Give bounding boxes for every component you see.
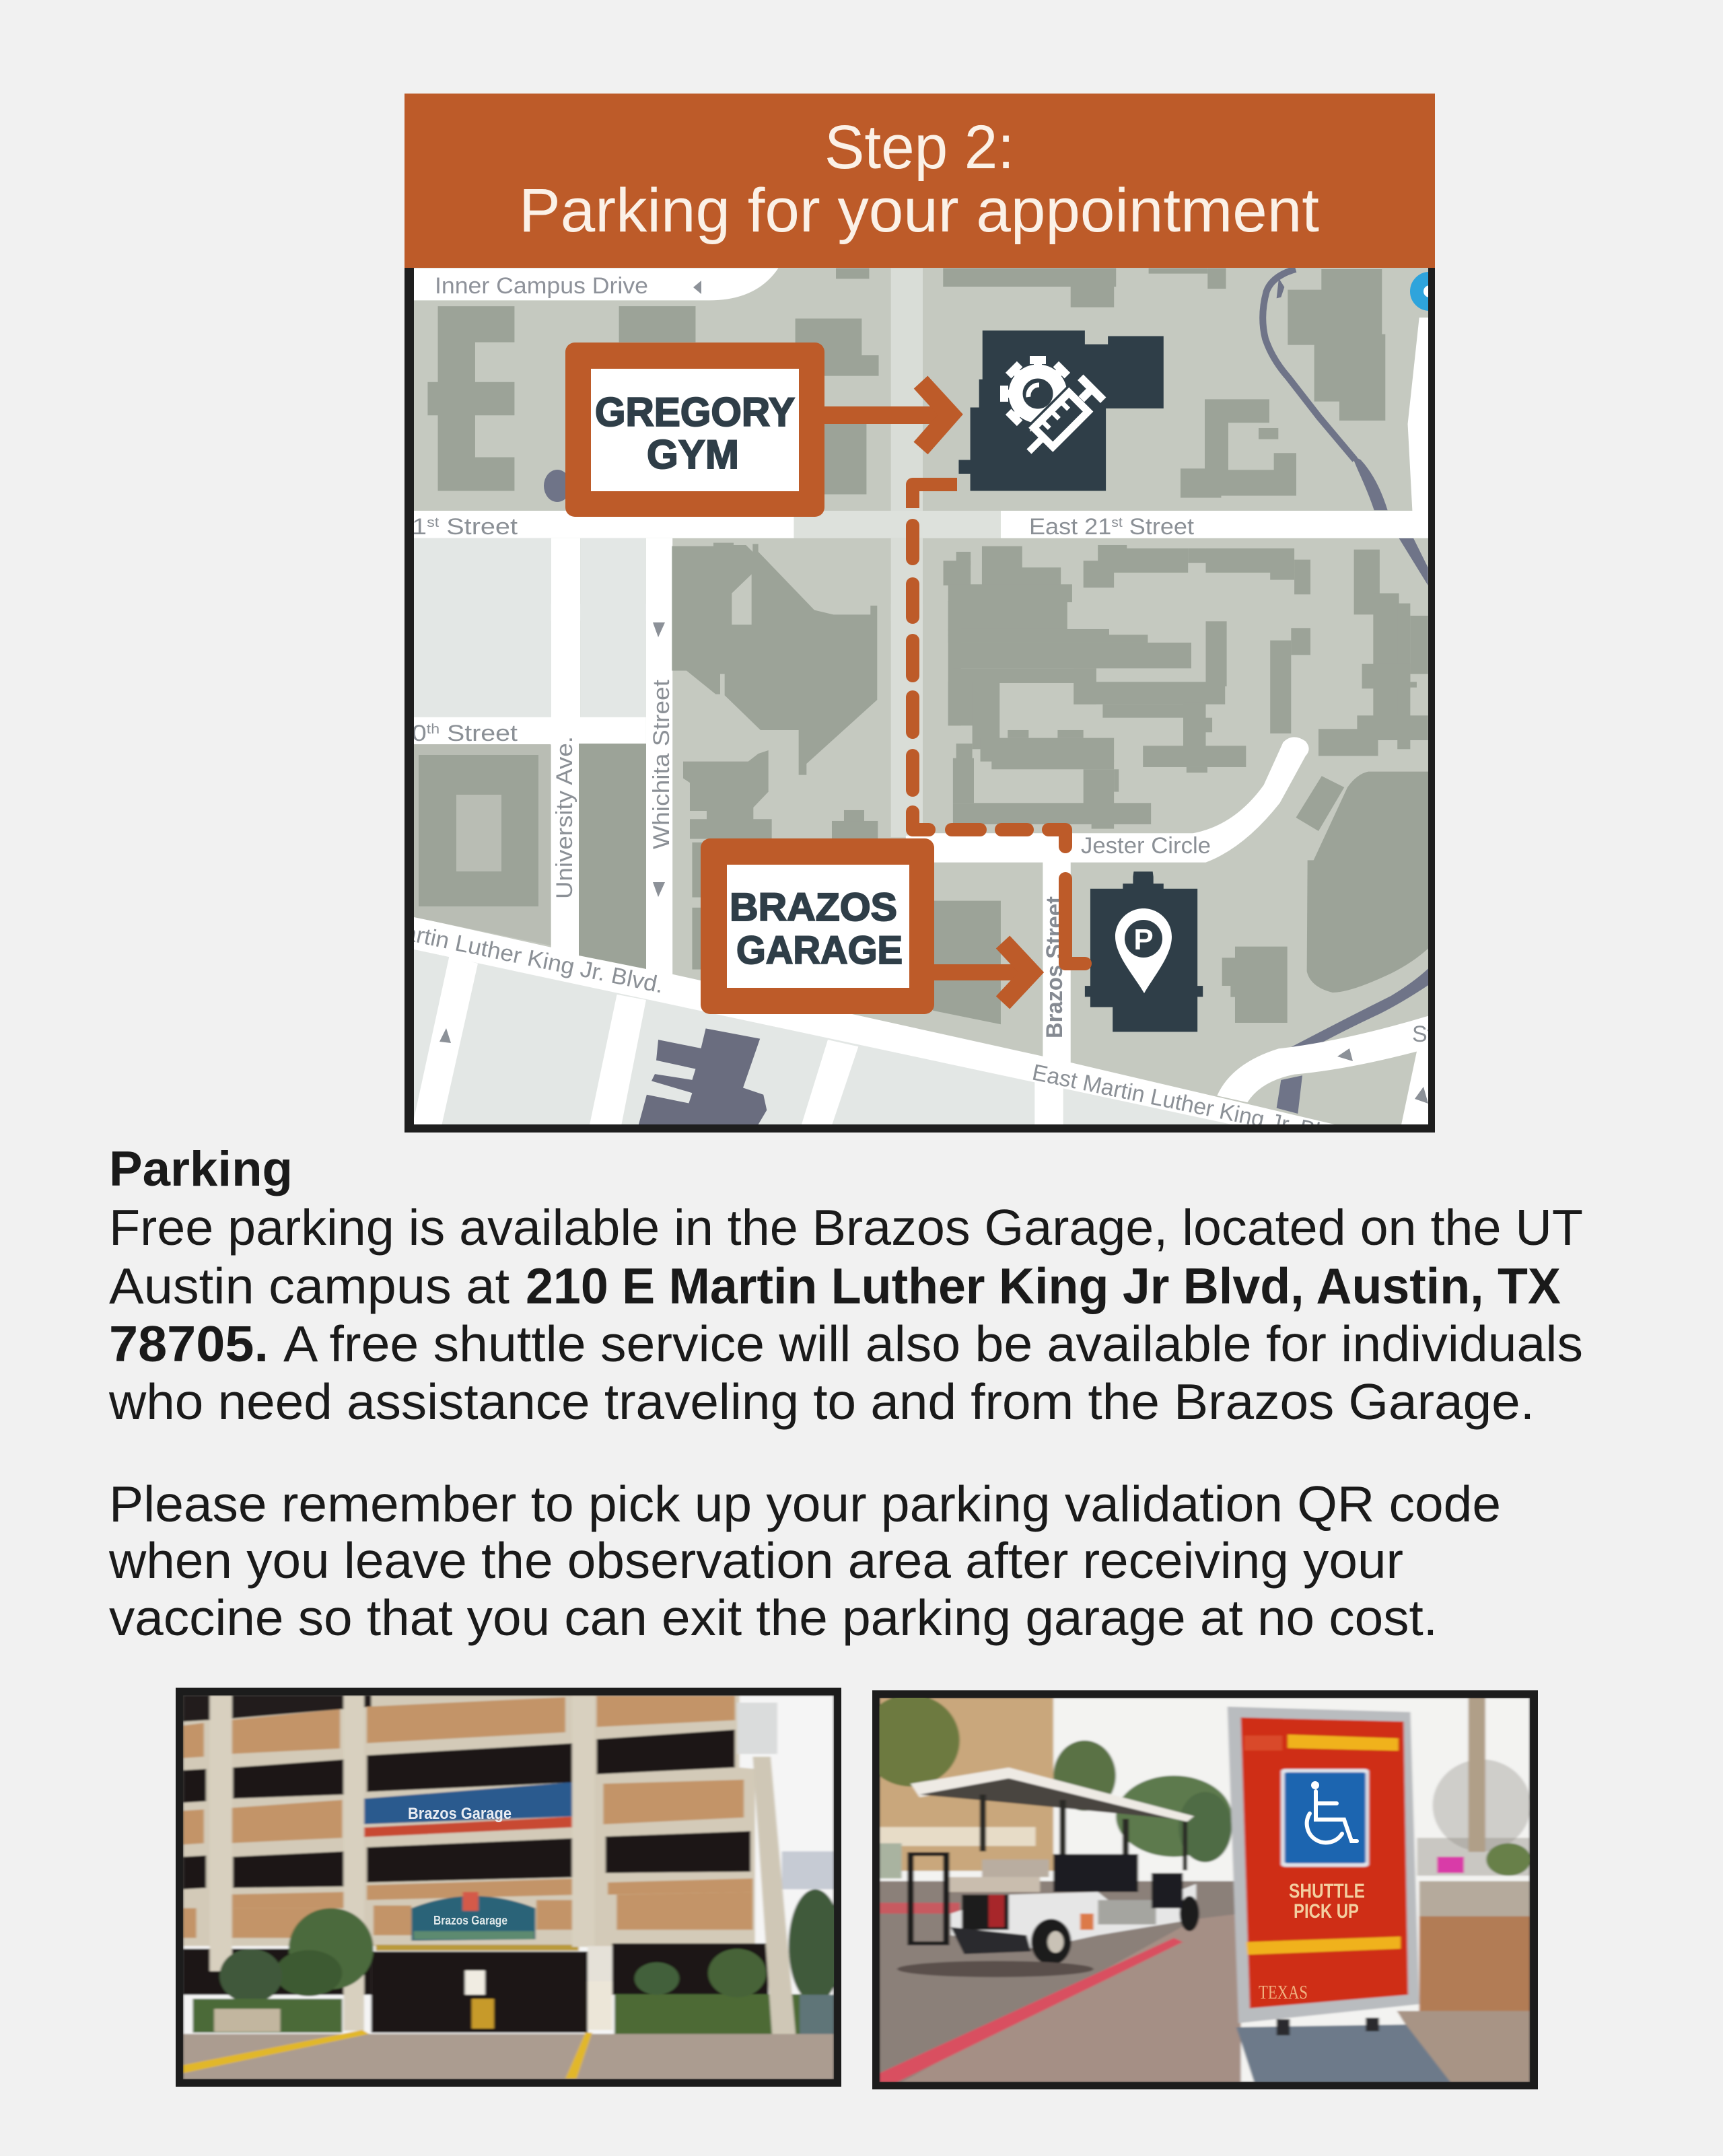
map street labels	[382, 273, 1434, 1150]
text block: parking details: when you leave the observation area after receiving your	[108, 1532, 1403, 1589]
photo: shuttle pick up: PICK UP	[1294, 1900, 1359, 1923]
text block: parking details	[108, 1142, 1583, 1646]
blue marker arc	[1417, 279, 1442, 304]
lower right road	[1217, 1015, 1429, 1126]
map street labels: East Martin Luther King Jr. Blvd.	[1030, 1060, 1351, 1150]
map street labels: Street	[439, 721, 518, 746]
text block: parking details: 78705.	[109, 1316, 269, 1372]
text block: parking details: vaccine so that you can exit the parking garage at no cost.	[109, 1589, 1438, 1646]
icon: wheelchair symbol	[1307, 1781, 1357, 1842]
gray-purple block	[638, 1028, 767, 1127]
right building cluster	[929, 545, 1431, 863]
callout: Gregory Gym: GYM	[647, 432, 739, 477]
creek lines	[1263, 269, 1429, 1114]
callout: Gregory Gym	[565, 343, 824, 517]
map roads and blocks	[411, 268, 1435, 1127]
text block: parking details: A free shuttle service will also be available for individuals	[283, 1316, 1583, 1372]
map street labels: Brazos Street	[1042, 896, 1067, 1038]
title banner: Parking for your appointment	[519, 176, 1319, 245]
building marker: Brazos Garage with parking pin	[1085, 871, 1203, 1032]
photo: shuttle pick up	[862, 1690, 1538, 2089]
direction triangles	[439, 281, 1428, 1104]
top right buildings	[1205, 269, 1385, 496]
route: dashed walking path	[913, 484, 1085, 964]
map street labels: East 21	[1029, 514, 1106, 540]
photo: Brazos Garage: Brazos Garage	[433, 1914, 507, 1927]
building marker: Gregory Gym	[958, 330, 1164, 491]
map street labels: Martin Luther King Jr. Blvd.	[382, 916, 666, 999]
photo: shuttle pick up: SHUTTLE	[1289, 1880, 1365, 1902]
callout: Brazos Garage: BRAZOS	[730, 886, 897, 929]
plaza circle	[544, 470, 565, 502]
heading: Parking: Parking	[109, 1142, 293, 1196]
photo: Brazos Garage	[176, 1688, 842, 2087]
map street labels: st	[1111, 515, 1123, 530]
callout: Brazos Garage: GARAGE	[736, 929, 903, 972]
map street labels: 21	[397, 514, 423, 540]
icon: parking pin: P	[1133, 923, 1154, 956]
text block: parking details: Please remember to pick up your parking validation QR code	[109, 1476, 1501, 1532]
map street labels: St	[1412, 1021, 1434, 1047]
map street labels: Inner Campus Drive	[435, 273, 648, 299]
title banner	[405, 94, 1435, 268]
lower right buildings	[1222, 860, 1429, 1023]
arrow: Gregory Gym	[824, 382, 950, 448]
photo: shuttle pick up: TEXAS	[1259, 1982, 1308, 2003]
photo: Brazos Garage: Brazos Garage	[408, 1805, 512, 1823]
arrow: Brazos Garage	[934, 942, 1031, 1003]
map street labels: 20	[397, 721, 423, 746]
map street labels: st	[427, 515, 439, 530]
icon: parking pin	[1115, 908, 1172, 993]
map street labels: University Ave.	[552, 736, 577, 899]
map street labels: Street	[439, 514, 518, 540]
map street labels: Whichita Street	[649, 679, 674, 849]
map street labels: Street	[1123, 514, 1195, 540]
map street labels: th	[427, 722, 439, 737]
map street labels: Jester Circle	[1081, 833, 1211, 859]
icon: virus and syringe	[1004, 360, 1106, 466]
callout: Gregory Gym: GREGORY	[595, 390, 795, 435]
text block: parking details: Austin campus at	[109, 1258, 509, 1314]
panel: campus map	[382, 268, 1442, 1150]
text block: parking details: 210 E Martin Luther King Jr Blvd, Austin, TX	[526, 1258, 1561, 1314]
callout: Brazos Garage	[701, 838, 934, 1014]
central large building	[672, 543, 878, 839]
map buildings	[419, 268, 1431, 1024]
text block: parking details: who need assistance traveling to and from the Brazos Garage.	[108, 1373, 1535, 1430]
text block: parking details: Free parking is available in the Brazos Garage, located on the UT	[109, 1199, 1583, 1256]
title banner: Step 2:	[824, 113, 1014, 182]
